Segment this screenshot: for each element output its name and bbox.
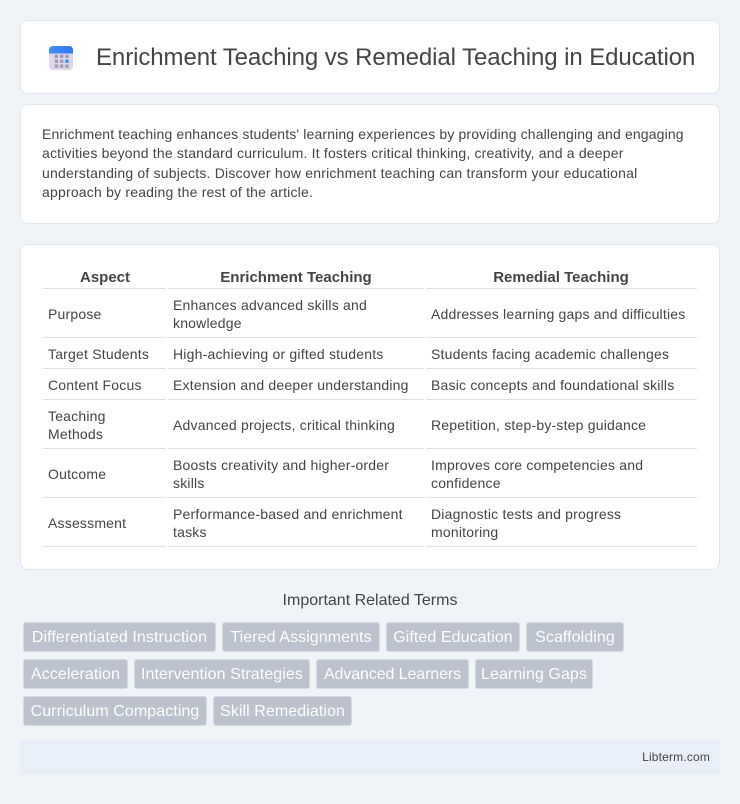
comparison table: Extension and deeper understanding xyxy=(173,377,409,393)
related terms tags: Intervention Strategies xyxy=(141,666,303,683)
related terms tags: Differentiated Instruction xyxy=(32,629,207,646)
comparison table: Teaching xyxy=(48,408,106,424)
related terms tags xyxy=(23,622,624,726)
related terms tags: Curriculum Compacting xyxy=(31,703,199,720)
comparison table: Purpose xyxy=(48,306,102,322)
comparison table: Enrichment Teaching xyxy=(220,269,372,286)
comparison table panel xyxy=(20,244,720,570)
intro text: activities beyond the standard curriculum. It fosters critical thinking, creativity, and a deeper xyxy=(42,145,624,161)
comparison table: Advanced projects, critical thinking xyxy=(173,417,395,433)
comparison table: Enhances advanced skills and xyxy=(173,297,367,313)
comparison table: High-achieving or gifted students xyxy=(173,346,384,362)
intro text xyxy=(42,126,684,200)
title: Enrichment Teaching vs Remedial Teaching in Education xyxy=(96,44,695,71)
comparison table: Content Focus xyxy=(48,377,142,393)
comparison table: skills xyxy=(173,475,205,491)
comparison table: tasks xyxy=(173,524,207,540)
related terms tags: Learning Gaps xyxy=(481,666,587,683)
comparison table: Methods xyxy=(48,426,103,442)
comparison table: Performance-based and enrichment xyxy=(173,506,403,522)
comparison table: Remedial Teaching xyxy=(493,269,629,286)
comparison table: Target Students xyxy=(48,346,149,362)
related terms tags: Skill Remediation xyxy=(220,703,345,720)
comparison table: Aspect xyxy=(80,269,130,286)
footer bar xyxy=(20,740,720,774)
intro text: approach by reading the rest of the article. xyxy=(42,184,313,200)
comparison table: Repetition, step-by-step guidance xyxy=(431,417,646,433)
related terms tags: Acceleration xyxy=(31,666,120,683)
comparison table: Addresses learning gaps and difficulties xyxy=(431,306,685,322)
intro text: Enrichment teaching enhances students' learning experiences by providing challenging and engaging xyxy=(42,126,684,142)
comparison table: monitoring xyxy=(431,524,498,540)
comparison table: Boosts creativity and higher-order xyxy=(173,457,389,473)
comparison table: Improves core competencies and xyxy=(431,457,643,473)
comparison table: Assessment xyxy=(48,515,126,531)
comparison table: Basic concepts and foundational skills xyxy=(431,377,674,393)
header panel xyxy=(20,20,720,94)
footer credit: Libterm.com xyxy=(642,750,710,764)
icon: calendar xyxy=(49,46,73,70)
related terms heading: Important Related Terms xyxy=(283,592,457,609)
related terms tags: Gifted Education xyxy=(393,629,513,646)
intro text: understanding of subjects. Discover how enrichment teaching can transform your educational xyxy=(42,165,637,181)
intro panel xyxy=(20,104,720,224)
related terms tags: Advanced Learners xyxy=(324,666,461,683)
comparison table: Diagnostic tests and progress xyxy=(431,506,621,522)
comparison table xyxy=(43,269,697,547)
comparison table: Students facing academic challenges xyxy=(431,346,669,362)
related terms tags: Scaffolding xyxy=(535,629,615,646)
comparison table: confidence xyxy=(431,475,501,491)
comparison table: knowledge xyxy=(173,315,242,331)
related terms tags: Tiered Assignments xyxy=(230,629,372,646)
comparison table: Outcome xyxy=(48,466,106,482)
